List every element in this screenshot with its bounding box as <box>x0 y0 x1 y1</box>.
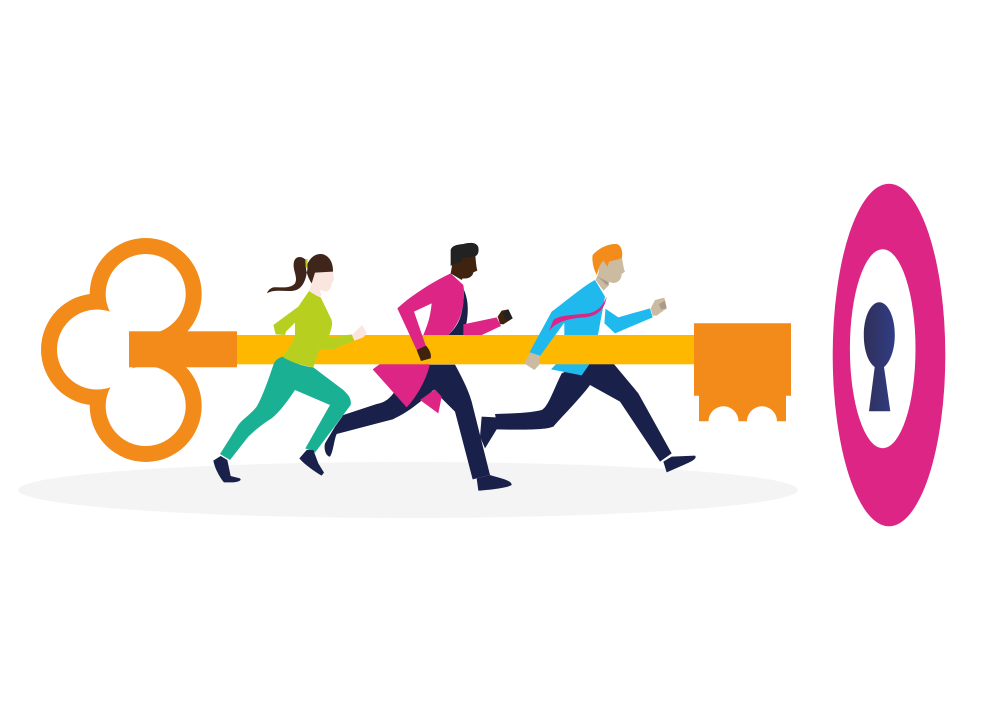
ground shadow <box>18 462 798 518</box>
runner 2 front arm and hand <box>397 302 431 361</box>
shoes <box>213 450 324 482</box>
key shaft <box>237 335 695 364</box>
torso and arms <box>273 291 354 367</box>
runner 3 front arm, hand and tie <box>524 297 607 370</box>
legs <box>220 357 351 460</box>
runner 3 body and legs <box>480 244 696 472</box>
key bit <box>694 323 791 421</box>
hand <box>352 325 367 341</box>
door opening <box>850 249 916 448</box>
runner 2 body and legs <box>325 243 513 491</box>
runner 1 woman <box>213 254 367 482</box>
key bow <box>41 238 237 462</box>
keyhole <box>864 302 895 411</box>
face and neck <box>309 270 334 297</box>
hair and ponytail <box>267 254 333 293</box>
door ring <box>833 184 945 526</box>
hair band <box>305 259 308 267</box>
